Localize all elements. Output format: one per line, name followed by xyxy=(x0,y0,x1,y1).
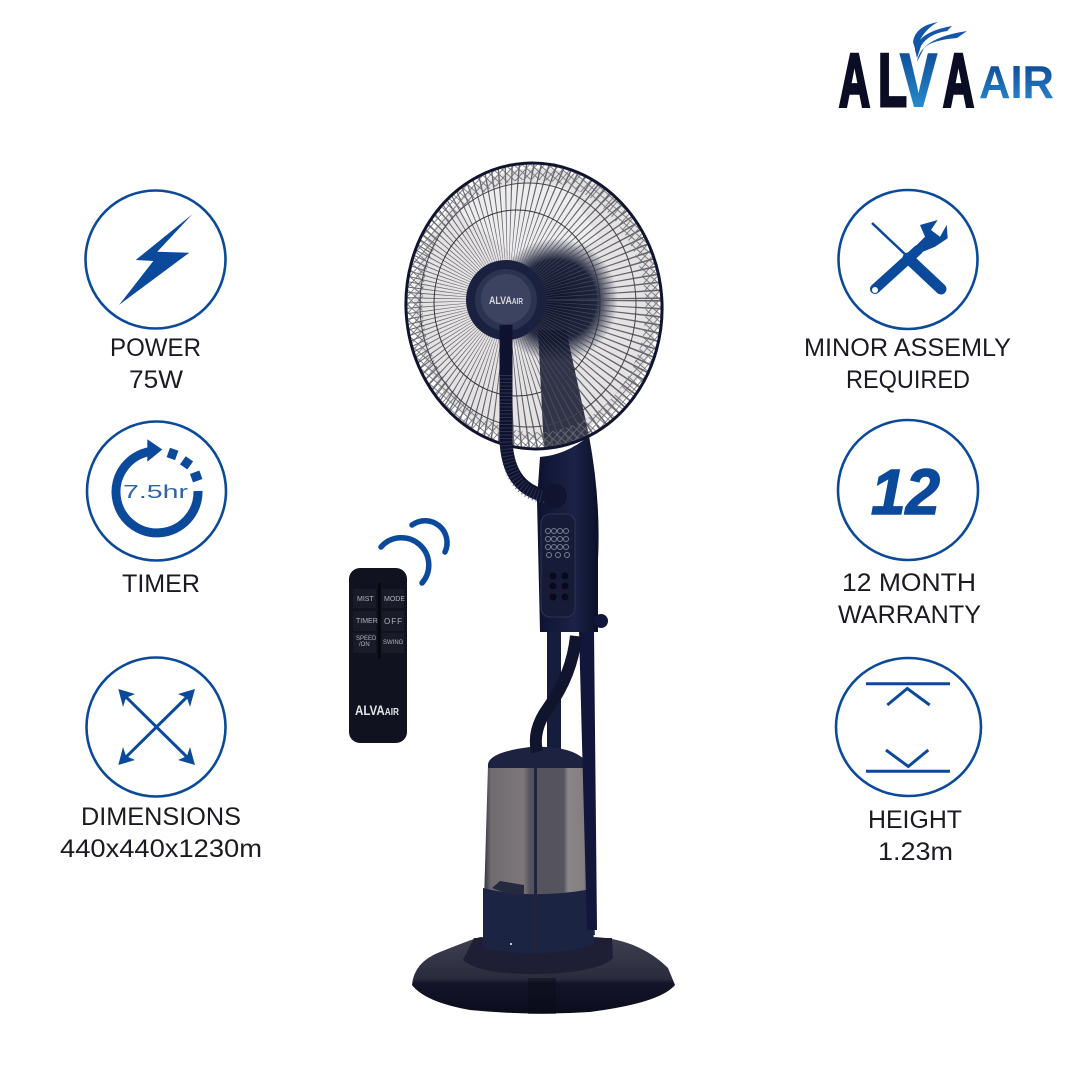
label: height: 1.23m xyxy=(878,838,953,866)
remote control: ALVAAIR xyxy=(355,702,400,718)
icon: timer: 7.5hr xyxy=(123,482,188,502)
remote button labels: MIST xyxy=(357,596,374,603)
icon: power bolt xyxy=(86,190,226,328)
icon: dimensions xyxy=(86,658,226,796)
hose xyxy=(536,636,576,752)
icon: 12 month: 12 xyxy=(871,456,940,528)
label: power: 75W xyxy=(129,366,183,394)
motor hub: ALVAAIR xyxy=(489,295,523,307)
remote button labels: MODE xyxy=(384,596,405,603)
icon: timer xyxy=(87,422,226,560)
base xyxy=(412,937,675,1014)
remote button labels: /ON xyxy=(359,642,370,648)
flexible neck xyxy=(506,325,567,508)
body and control column xyxy=(537,436,608,632)
icon: 12 month xyxy=(838,420,978,560)
pole left xyxy=(547,630,561,755)
label: timer: TIMER xyxy=(122,570,200,598)
label: assembly xyxy=(804,334,1011,394)
label: height: HEIGHT xyxy=(868,806,962,834)
logo wordmark: A xyxy=(943,38,974,122)
logo swoosh xyxy=(913,22,967,62)
logo wordmark xyxy=(839,38,1054,122)
icon: tools xyxy=(838,190,978,329)
logo wordmark: V xyxy=(900,38,937,122)
fan product xyxy=(396,154,675,1014)
label: warranty: WARRANTY xyxy=(838,601,981,629)
remote button labels: OFF xyxy=(384,617,403,626)
water tank xyxy=(483,747,595,953)
label: warranty: 12 MONTH xyxy=(842,569,976,597)
label: assembly: REQUIRED xyxy=(846,366,970,394)
pole right xyxy=(579,630,597,930)
fan grille and blades xyxy=(396,154,672,458)
logo wordmark: A xyxy=(839,38,870,122)
label: warranty xyxy=(838,569,981,629)
icon: remote signal arcs xyxy=(381,521,447,583)
icon: height xyxy=(836,658,981,796)
label: dimensions xyxy=(60,803,262,863)
label: height xyxy=(868,806,962,866)
label: dimensions: 440x440x1230m xyxy=(60,835,262,863)
remote button labels: TIMER xyxy=(356,618,378,625)
label: power xyxy=(110,334,201,394)
label: dimensions: DIMENSIONS xyxy=(81,803,241,831)
logo wordmark: AIR xyxy=(979,56,1054,108)
label: assembly: MINOR ASSEMLY xyxy=(804,334,1011,362)
remote control xyxy=(349,568,407,743)
remote button labels: SPEED xyxy=(356,636,377,642)
motor hub xyxy=(466,260,546,340)
remote button labels xyxy=(356,596,405,648)
remote button labels: SWING xyxy=(383,640,404,646)
logo: Alva Air xyxy=(839,22,1054,122)
label: power: POWER xyxy=(110,334,201,362)
logo wordmark: L xyxy=(878,38,907,122)
